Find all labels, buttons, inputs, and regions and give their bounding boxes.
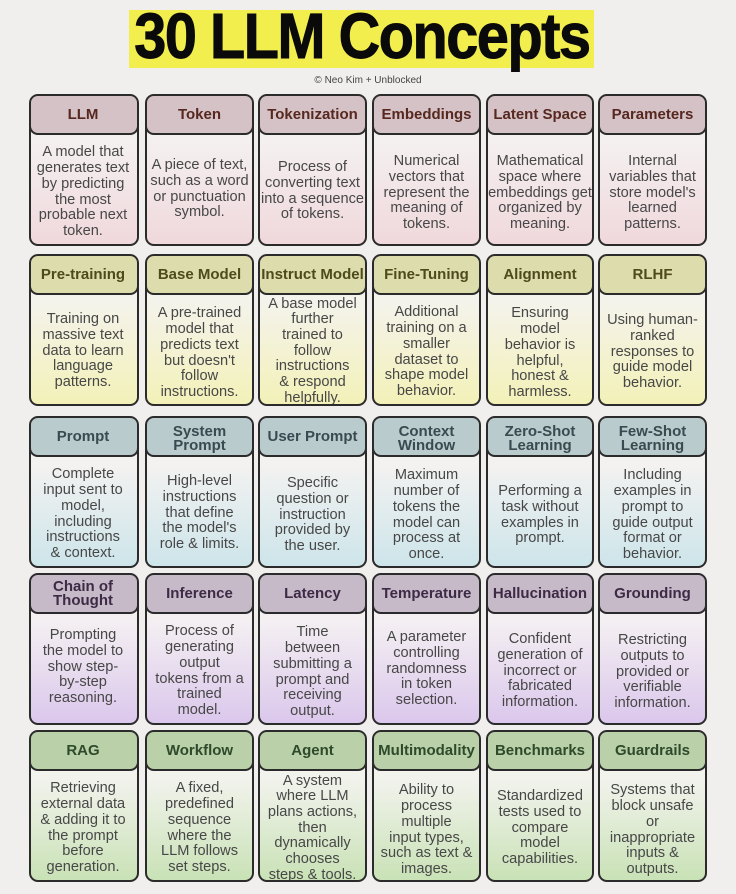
- card: Fine-Tuning: Additional: [394, 304, 459, 320]
- card: LLM: generates text: [37, 160, 129, 176]
- card: Token: A piece of text,: [152, 157, 247, 173]
- card: Multimodality: images.: [401, 861, 452, 877]
- card: Guardrails: Systems that: [610, 782, 695, 798]
- card: Embeddings: Numerical: [394, 153, 459, 169]
- card: Benchmarks: tests used to: [499, 804, 581, 820]
- card: Fine-Tuning: Fine-Tuning: [384, 266, 469, 283]
- card: System Prompt: role & limits.: [160, 536, 239, 552]
- card: Zero-Shot Learning: Zero-Shot: [505, 423, 575, 440]
- card: User Prompt: instruction: [279, 507, 346, 523]
- card: Tokenization: [258, 94, 367, 246]
- card: Guardrails: inputs &: [626, 845, 679, 861]
- card: Few-Shot Learning: Learning: [621, 436, 684, 454]
- card: Context Window: number of: [394, 483, 459, 499]
- card: Pre-training: [29, 254, 139, 406]
- card: Base Model: follow: [181, 368, 218, 384]
- card: LLM: A model that: [42, 144, 124, 160]
- card: Context Window: model can: [393, 514, 460, 530]
- card: Token: [145, 94, 254, 246]
- card: Parameters: store model's: [609, 185, 696, 201]
- card: System Prompt: System: [173, 423, 226, 440]
- card: Workflow: Workflow: [166, 742, 233, 759]
- card: Benchmarks: [486, 730, 594, 882]
- card: Chain of Thought: show step-: [48, 659, 118, 675]
- card: Embeddings: [372, 94, 481, 246]
- card: System Prompt: that define: [165, 505, 234, 521]
- card: Token: symbol.: [174, 204, 225, 220]
- credit line: © Neo Kim + Unblocked: [314, 75, 422, 86]
- card: RAG: [29, 730, 139, 882]
- card: RLHF: responses to: [611, 344, 694, 360]
- card: LLM: probable next: [39, 207, 127, 223]
- card: RAG: RAG: [66, 742, 100, 759]
- card: Latency: submitting a: [273, 656, 352, 672]
- card: Prompt: instructions: [46, 529, 120, 545]
- card: Temperature: selection.: [396, 692, 457, 708]
- card: Latency: Latency: [284, 585, 341, 602]
- card: Guardrails: inappropriate: [610, 830, 695, 846]
- card: Token: Token: [178, 106, 221, 123]
- card: Benchmarks: Standardized: [497, 788, 583, 804]
- card: Guardrails: or: [646, 814, 659, 830]
- card: Chain of Thought: Thought: [53, 592, 113, 608]
- card: RAG: generation.: [46, 859, 120, 875]
- card: RLHF: ranked: [630, 328, 675, 344]
- card: Grounding: Restricting: [618, 632, 687, 648]
- card: Benchmarks: capabilities.: [502, 851, 578, 867]
- card: RLHF: behavior.: [623, 375, 682, 391]
- card: Instruct Model: & respond: [279, 374, 346, 390]
- card: Latency: prompt and: [276, 672, 349, 688]
- card: Pre-training: data to learn: [42, 343, 124, 359]
- card: Instruct Model: A base model: [268, 296, 357, 312]
- card: Temperature: Temperature: [382, 585, 471, 602]
- card: Fine-Tuning: smaller: [403, 336, 450, 352]
- card: Agent: Agent: [291, 742, 334, 759]
- card: User Prompt: the user.: [284, 538, 340, 554]
- card: Fine-Tuning: [372, 254, 481, 406]
- card: Workflow: set steps.: [168, 859, 231, 875]
- card: Latent Space: embeddings get: [488, 185, 592, 201]
- card: Instruct Model: follow: [294, 343, 331, 359]
- card: Hallucination: fabricated: [508, 678, 572, 694]
- card: Parameters: Internal: [628, 153, 677, 169]
- card: Parameters: patterns.: [624, 216, 681, 232]
- card: Zero-Shot Learning: prompt.: [515, 530, 565, 546]
- card: Pre-training: massive text: [42, 327, 124, 343]
- card: Chain of Thought: Chain of: [53, 578, 113, 595]
- card: Temperature: [372, 573, 481, 725]
- card: System Prompt: High-level: [167, 473, 232, 489]
- card: Workflow: [145, 730, 254, 882]
- card: Embeddings: meaning of: [390, 200, 463, 216]
- card: Fine-Tuning: training on a: [386, 320, 467, 336]
- card: Temperature: A parameter: [387, 629, 466, 645]
- card: Prompt: Complete: [52, 466, 114, 482]
- card: Temperature: in token: [401, 676, 452, 692]
- card: RAG: before: [62, 843, 104, 859]
- card: Latent Space: Mathematical: [497, 153, 583, 169]
- card: Workflow: sequence: [168, 812, 231, 828]
- card: Grounding: [598, 573, 707, 725]
- card: Guardrails: block unsafe: [612, 798, 693, 814]
- card: Benchmarks: Benchmarks: [495, 742, 585, 759]
- card: System Prompt: Prompt: [173, 436, 226, 454]
- card: Context Window: process at: [393, 530, 460, 546]
- card: Pre-training: language: [53, 358, 113, 374]
- card: Pre-training: patterns.: [55, 374, 111, 390]
- card: Chain of Thought: the model to: [43, 643, 123, 659]
- card: System Prompt: [145, 416, 254, 568]
- card: Parameters: variables that: [609, 169, 696, 185]
- card: RAG: the prompt: [48, 828, 118, 844]
- card: LLM: token.: [63, 223, 103, 239]
- card: Few-Shot Learning: examples in: [614, 483, 691, 499]
- card: Context Window: [372, 416, 481, 568]
- card: Grounding: Grounding: [614, 585, 691, 602]
- card: Grounding: information.: [614, 695, 691, 711]
- card: Embeddings: tokens.: [403, 216, 450, 232]
- card: Latent Space: space where: [499, 169, 581, 185]
- card: Alignment: Ensuring: [511, 305, 569, 321]
- card: Latent Space: organized by: [498, 200, 582, 216]
- card: Latency: receiving: [283, 687, 342, 703]
- card: RAG: Retrieving: [50, 780, 116, 796]
- card: RAG: external data: [41, 796, 125, 812]
- card: Inference: [145, 573, 254, 725]
- card: Multimodality: Ability to: [399, 782, 454, 798]
- card: Agent: A system: [283, 773, 342, 789]
- card: Parameters: learned: [628, 200, 677, 216]
- card: Workflow: where the: [167, 828, 232, 844]
- card: Alignment: Alignment: [503, 266, 577, 283]
- card: Fine-Tuning: dataset to: [394, 352, 459, 368]
- card: LLM: by predicting: [42, 176, 124, 192]
- card: Token: or punctuation: [153, 188, 246, 204]
- card: Tokenization: of tokens.: [281, 206, 344, 222]
- card: Guardrails: [598, 730, 707, 882]
- card: Agent: [258, 730, 367, 882]
- card: Zero-Shot Learning: Performing a: [498, 483, 582, 499]
- card: Base Model: model that: [165, 321, 234, 337]
- card: Prompt: input sent to: [43, 482, 123, 498]
- card: Inference: Process of: [165, 623, 234, 639]
- card: Temperature: controlling: [393, 645, 460, 661]
- card: System Prompt: the model's: [162, 520, 237, 536]
- card: Alignment: behavior is: [505, 337, 575, 353]
- card: Pre-training: Pre-training: [41, 266, 125, 283]
- card: Hallucination: incorrect or: [503, 663, 576, 679]
- card: Latency: between: [285, 640, 340, 656]
- card: Workflow: LLM follows: [161, 843, 238, 859]
- card: Alignment: helpful,: [516, 352, 564, 368]
- card: Inference: trained: [177, 686, 222, 702]
- card: Inference: generating: [165, 639, 234, 655]
- card: Chain of Thought: by-step: [59, 674, 107, 690]
- card: Agent: where LLM: [276, 788, 349, 804]
- card: Hallucination: information.: [502, 694, 578, 710]
- card: Multimodality: multiple: [401, 814, 452, 830]
- card: Agent: chooses: [285, 851, 340, 867]
- card: RLHF: Using human-: [607, 312, 698, 328]
- card: RAG: & adding it to: [40, 812, 126, 828]
- card: Hallucination: Hallucination: [493, 585, 587, 602]
- card: Zero-Shot Learning: Learning: [508, 436, 572, 454]
- card: System Prompt: instructions: [163, 489, 236, 505]
- card: Latency: output.: [290, 703, 335, 719]
- card: Prompt: including: [54, 514, 112, 530]
- card: Tokenization: Tokenization: [267, 106, 358, 123]
- card: Context Window: Window: [398, 436, 455, 454]
- card: Guardrails: outputs.: [627, 861, 678, 877]
- card: LLM: [29, 94, 139, 246]
- card: Multimodality: process: [401, 798, 452, 814]
- card: Few-Shot Learning: behavior.: [623, 546, 682, 562]
- card: Few-Shot Learning: prompt to: [622, 499, 683, 515]
- card: Multimodality: [372, 730, 481, 882]
- card: Chain of Thought: reasoning.: [49, 690, 117, 706]
- card: Latency: Time: [297, 624, 328, 640]
- card: User Prompt: [258, 416, 367, 568]
- card: Few-Shot Learning: Including: [623, 467, 682, 483]
- card: Inference: tokens from a: [155, 670, 244, 686]
- card: User Prompt: provided by: [275, 522, 350, 538]
- card: Fine-Tuning: behavior.: [397, 383, 456, 399]
- card: Base Model: A pre-trained: [158, 305, 241, 321]
- card: Alignment: model: [520, 321, 560, 337]
- card: Few-Shot Learning: format or: [623, 530, 682, 546]
- card: Instruct Model: Instruct Model: [261, 266, 364, 283]
- card: Instruct Model: helpfully.: [284, 390, 341, 406]
- card: Grounding: outputs to: [620, 648, 685, 664]
- card: Pre-training: Training on: [47, 311, 119, 327]
- card: Multimodality: such as text &: [381, 845, 472, 861]
- card: Latent Space: meaning.: [510, 216, 570, 232]
- card: Chain of Thought: [29, 573, 139, 725]
- card: Latent Space: Latent Space: [493, 106, 587, 123]
- card: Few-Shot Learning: Few-Shot: [619, 423, 686, 440]
- card: User Prompt: User Prompt: [267, 428, 358, 445]
- card: Agent: then: [298, 820, 327, 836]
- card: Multimodality: Multimodality: [378, 742, 475, 759]
- card: Embeddings: represent the: [384, 185, 470, 201]
- card: Latent Space: [486, 94, 594, 246]
- card: Tokenization: Process of: [278, 159, 347, 175]
- card: Alignment: harmless.: [508, 384, 572, 400]
- card: Alignment: honest &: [511, 368, 569, 384]
- card: Instruct Model: trained to: [282, 327, 343, 343]
- card: Prompt: Prompt: [57, 428, 109, 445]
- card: Tokenization: into a sequence: [261, 190, 364, 206]
- card: RLHF: guide model: [613, 359, 692, 375]
- card: RLHF: [598, 254, 707, 406]
- card: Embeddings: vectors that: [389, 169, 464, 185]
- card: RLHF: RLHF: [632, 266, 672, 283]
- card: Embeddings: Embeddings: [381, 106, 472, 123]
- card: LLM: the most: [55, 192, 111, 208]
- card: Context Window: tokens the: [393, 499, 460, 515]
- card: Base Model: [145, 254, 254, 406]
- card: Prompt: & context.: [51, 545, 115, 561]
- card: Prompt: [29, 416, 139, 568]
- card: Inference: model.: [178, 702, 221, 718]
- card: Base Model: but doesn't: [164, 352, 235, 368]
- card: User Prompt: question or: [276, 491, 349, 507]
- card: Grounding: verifiable: [623, 679, 682, 695]
- card: Instruct Model: further: [291, 311, 334, 327]
- card: Workflow: A fixed,: [176, 780, 223, 796]
- card: Context Window: Context: [399, 423, 454, 440]
- card: Fine-Tuning: shape model: [385, 367, 468, 383]
- card: Prompt: model,: [61, 498, 105, 514]
- card: Context Window: once.: [409, 546, 444, 562]
- card: Context Window: Maximum: [395, 467, 458, 483]
- card: Agent: dynamically: [274, 835, 351, 851]
- card: Zero-Shot Learning: task without: [501, 499, 579, 515]
- card: Parameters: [598, 94, 707, 246]
- card: Few-Shot Learning: guide output: [612, 514, 693, 530]
- card: Base Model: Base Model: [158, 266, 241, 283]
- card: User Prompt: Specific: [287, 475, 338, 491]
- card: Base Model: predicts text: [160, 337, 239, 353]
- card: Parameters: Parameters: [612, 106, 693, 123]
- card: Instruct Model: instructions: [276, 358, 349, 374]
- card: Inference: output: [179, 655, 220, 671]
- card: Grounding: provided or: [616, 664, 689, 680]
- card: Tokenization: converting text: [265, 175, 360, 191]
- card: Base Model: instructions.: [161, 384, 238, 400]
- card: Few-Shot Learning: [598, 416, 707, 568]
- card: Temperature: randomness: [386, 661, 467, 677]
- card: Benchmarks: compare: [512, 820, 568, 836]
- card: Hallucination: Confident: [509, 631, 571, 647]
- card: Zero-Shot Learning: [486, 416, 594, 568]
- card: LLM: LLM: [68, 106, 98, 123]
- card: Zero-Shot Learning: examples in: [501, 514, 579, 530]
- card: Hallucination: [486, 573, 594, 725]
- card: Alignment: [486, 254, 594, 406]
- card: Agent: plans actions,: [268, 804, 357, 820]
- card: Latency: [258, 573, 367, 725]
- card: Hallucination: generation of: [497, 647, 583, 663]
- card: Chain of Thought: Prompting: [50, 627, 116, 643]
- card: Benchmarks: model: [520, 835, 560, 851]
- card: Inference: Inference: [166, 585, 233, 602]
- title: 30 LLM Concepts: [134, 0, 589, 72]
- card: Guardrails: Guardrails: [615, 742, 690, 759]
- card: Instruct Model: [258, 254, 367, 406]
- card: Workflow: predefined: [165, 796, 234, 812]
- card: Token: such as a word: [150, 173, 249, 189]
- card: Multimodality: input types,: [389, 830, 464, 846]
